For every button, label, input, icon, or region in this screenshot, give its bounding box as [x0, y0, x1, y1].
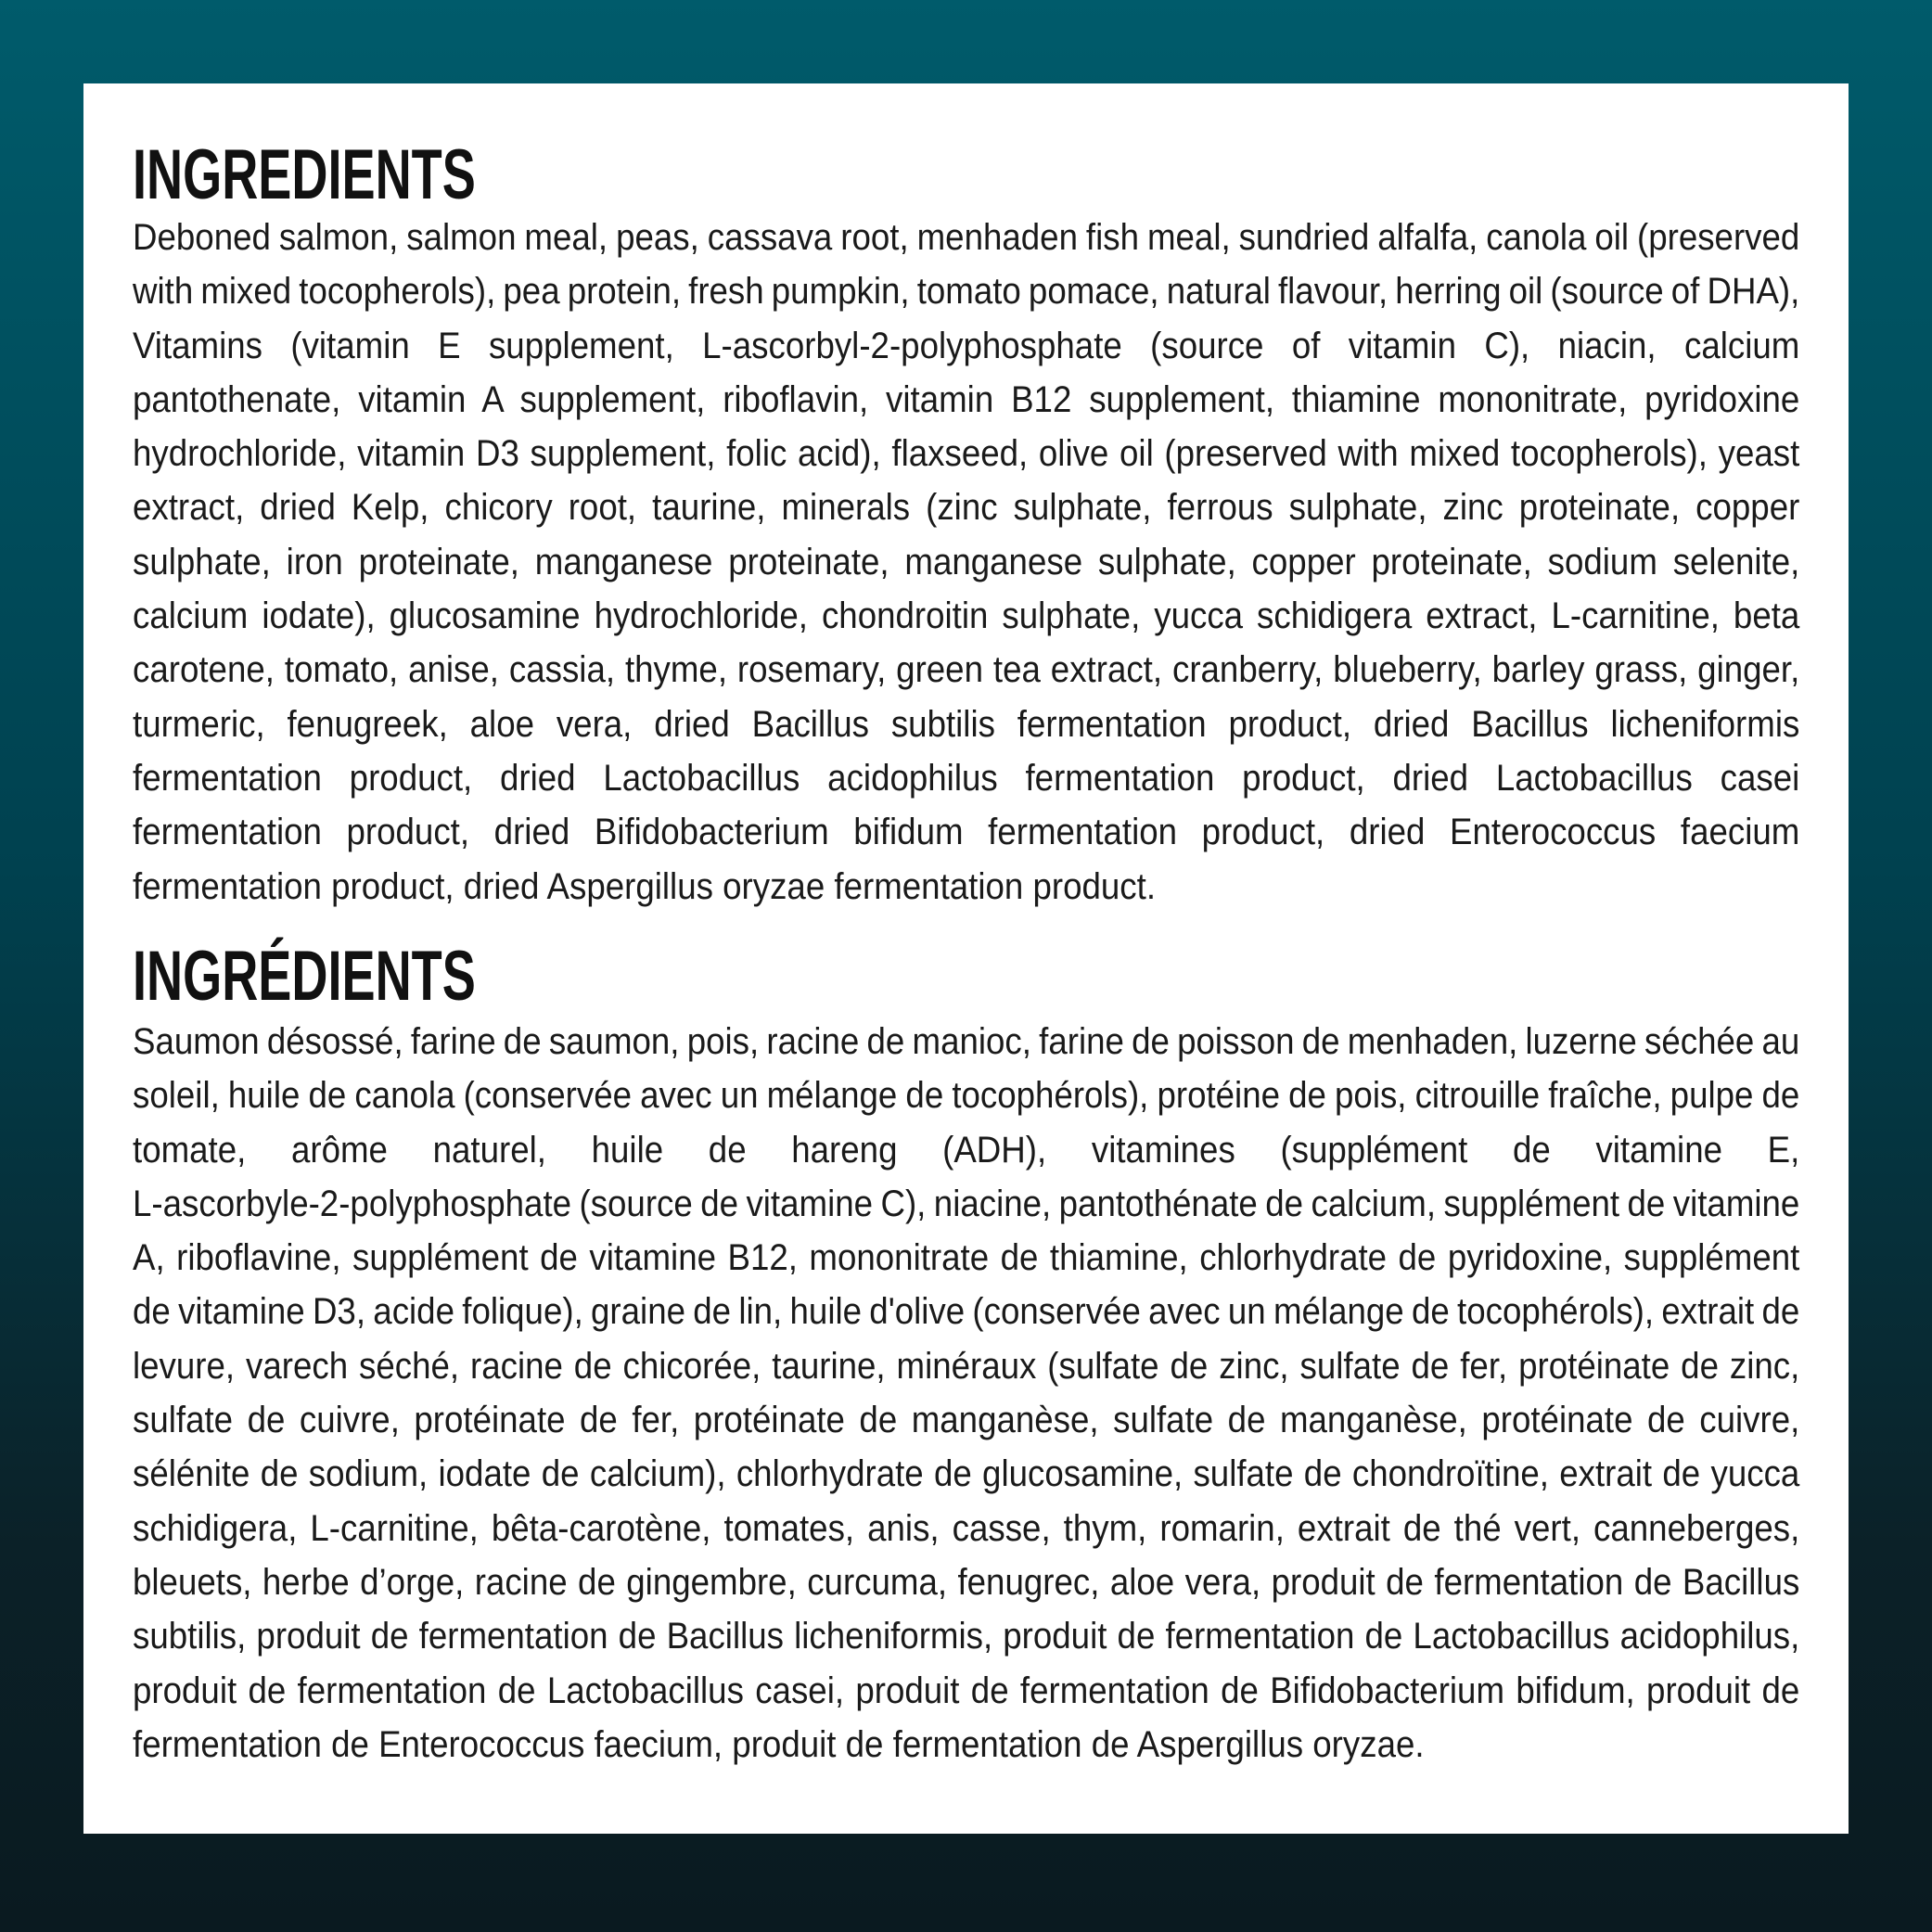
- text block: english ingredients: extract, dried Kelp, chicory root, taurine, minerals (zinc sulphate, ferrous sulphate, zinc proteinate, copper: [133, 487, 1799, 528]
- text block: english ingredients: Deboned salmon, salmon meal, peas, cassava root, menhaden fish meal, sundried alfalfa, canola oil (preserved: [133, 217, 1799, 258]
- text block: english ingredients: fermentation product, dried Aspergillus oryzae fermentation product.: [133, 866, 1156, 907]
- text block: english ingredients: [133, 217, 1799, 907]
- text block: english ingredients: hydrochloride, vitamin D3 supplement, folic acid), flaxseed, olive oil (preserved with mixed tocopherols), yeast: [133, 433, 1799, 474]
- text block: english ingredients: turmeric, fenugreek, aloe vera, dried Bacillus subtilis fermentation product, dried Bacillus licheniformis: [133, 704, 1799, 745]
- text block: french ingredients: A, riboflavine, supplément de vitamine B12, mononitrate de thiamine, chlorhydrate de pyridoxine, supplément: [133, 1237, 1799, 1278]
- text block: english ingredients: with mixed tocopherols), pea protein, fresh pumpkin, tomato pomace, natural flavour, herring oil (source of DHA),: [133, 271, 1799, 312]
- text block: french ingredients: subtilis, produit de fermentation de Bacillus licheniformis, produit de fermentation de Lactobacillus acidophilus,: [133, 1616, 1799, 1657]
- text block: english ingredients: fermentation product, dried Bifidobacterium bifidum fermentation product, dried Enterococcus faecium: [133, 812, 1799, 852]
- text block: english ingredients: calcium iodate), glucosamine hydrochloride, chondroitin sulphate, yucca schidigera extract, L-carnitine, beta: [133, 595, 1799, 636]
- heading: english ingredients: INGREDIENTS: [133, 135, 476, 214]
- text block: english ingredients: carotene, tomato, anise, cassia, thyme, rosemary, green tea extract, cranberry, blueberry, barley grass, ginger,: [133, 649, 1799, 690]
- text block: french ingredients: [133, 1021, 1799, 1765]
- text block: french ingredients: bleuets, herbe d’orge, racine de gingembre, curcuma, fenugrec, aloe vera, produit de fermentation de Bacillus: [133, 1562, 1799, 1603]
- text block: french ingredients: schidigera, L-carnitine, bêta-carotène, tomates, anis, casse, thym, romarin, extrait de thé vert, canneberges,: [133, 1508, 1799, 1549]
- text block: french ingredients: Saumon désossé, farine de saumon, pois, racine de manioc, farine de poisson de menhaden, luzerne séchée au: [133, 1021, 1799, 1062]
- text block: french ingredients: levure, varech séché, racine de chicorée, taurine, minéraux (sulfate de zinc, sulfate de fer, protéinate de zinc,: [133, 1346, 1799, 1387]
- text block: french ingredients: tomate, arôme naturel, huile de hareng (ADH), vitamines (supplément de vitamine E,: [133, 1130, 1799, 1171]
- text block: french ingredients: sélénite de sodium, iodate de calcium), chlorhydrate de glucosamine, sulfate de chondroïtine, extrait de yucca: [133, 1453, 1799, 1494]
- text block: french ingredients: L-ascorbyle-2-polyphosphate (source de vitamine C), niacine, pantothénate de calcium, supplément de vitamine: [133, 1184, 1799, 1224]
- text block: english ingredients: pantothenate, vitamin A supplement, riboflavin, vitamin B12 supplement, thiamine mononitrate, pyridoxine: [133, 379, 1799, 420]
- text block: english ingredients: Vitamins (vitamin E supplement, L-ascorbyl-2-polyphosphate (source of vitamin C), niacin, calcium: [133, 326, 1799, 366]
- text block: french ingredients: sulfate de cuivre, protéinate de fer, protéinate de manganèse, sulfate de manganèse, protéinate de cuivre,: [133, 1400, 1799, 1440]
- text block: french ingredients: fermentation de Enterococcus faecium, produit de fermentation de Aspergillus oryzae.: [133, 1724, 1425, 1765]
- heading: french ingredients: INGRÉDIENTS: [133, 937, 476, 1016]
- text block: french ingredients: de vitamine D3, acide folique), graine de lin, huile d'olive (conservée avec un mélange de tocophérols), extrait de: [133, 1291, 1799, 1332]
- text block: french ingredients: soleil, huile de canola (conservée avec un mélange de tocophérols), protéine de pois, citrouille fraîche, pulpe de: [133, 1075, 1799, 1116]
- text block: english ingredients: sulphate, iron proteinate, manganese proteinate, manganese sulphate, copper proteinate, sodium selenite,: [133, 542, 1799, 582]
- text block: french ingredients: produit de fermentation de Lactobacillus casei, produit de fermentation de Bifidobacterium bifidum, produit de: [133, 1670, 1799, 1711]
- text block: english ingredients: fermentation product, dried Lactobacillus acidophilus fermentation product, dried Lactobacillus casei: [133, 758, 1799, 799]
